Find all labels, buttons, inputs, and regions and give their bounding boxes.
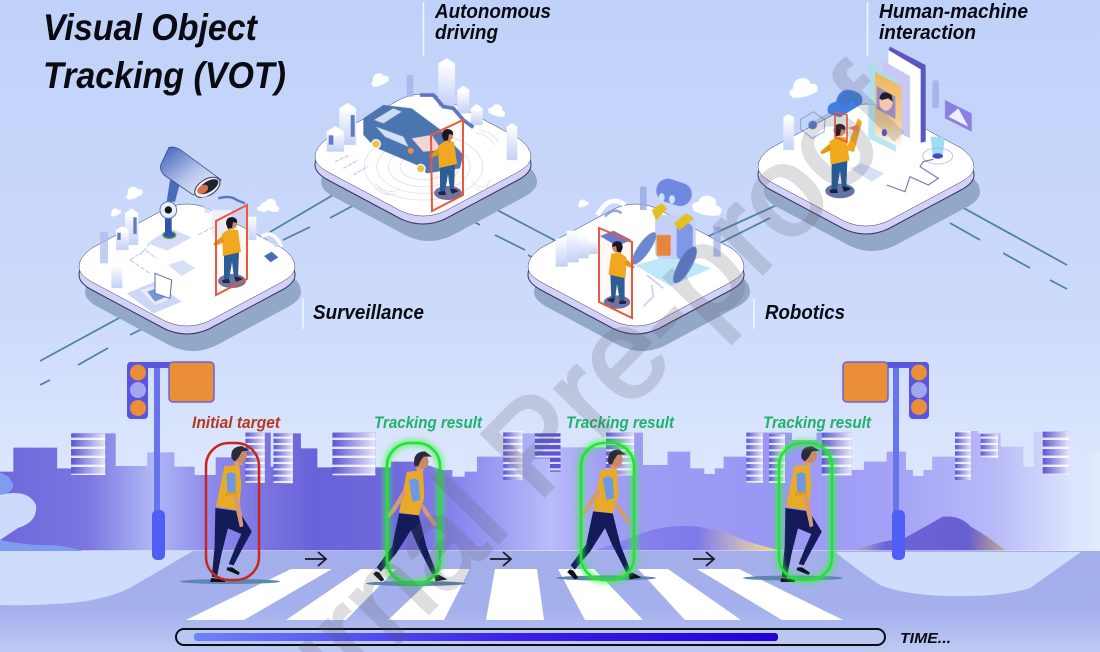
label: human-machine interaction: interaction xyxy=(879,22,976,44)
surveillance illustration xyxy=(100,147,282,313)
street scene: left skyline xyxy=(0,431,550,550)
label: autonomous driving: driving xyxy=(435,22,498,44)
icon: wifi node xyxy=(262,234,282,262)
icon: circuit line xyxy=(887,159,938,192)
crosswalk stripes xyxy=(186,569,843,620)
label: human-machine interaction xyxy=(868,1,1028,56)
person in red box: surveillance xyxy=(213,205,247,295)
label: robotics: Robotics xyxy=(765,302,845,324)
label: surveillance: Surveillance xyxy=(313,302,424,324)
right traffic light xyxy=(843,362,929,560)
person with red head box: interaction xyxy=(820,112,862,198)
icon: city blocks xyxy=(100,208,256,288)
right pavement xyxy=(835,552,1081,596)
icon: pillar and cube xyxy=(783,112,825,150)
label: surveillance xyxy=(303,298,424,329)
icon: control pad xyxy=(168,260,195,276)
icon: laptop xyxy=(127,273,182,313)
green box xyxy=(581,443,634,580)
label: tracking result 1: Tracking result xyxy=(374,414,483,432)
icon: robot xyxy=(628,176,701,286)
left bush xyxy=(0,493,36,540)
icon: surveillance camera xyxy=(160,147,223,213)
icon: wifi signal xyxy=(597,201,625,217)
icon: radar rings xyxy=(364,130,498,200)
label: human-machine interaction: Human-machine xyxy=(879,1,1028,23)
platform: robotics xyxy=(528,176,750,351)
platform: autonomous driving xyxy=(315,58,537,241)
label: time: TIME... xyxy=(900,630,951,647)
label: initial target: Initial target xyxy=(192,414,281,432)
person in red box: robotics xyxy=(599,228,635,318)
label: autonomous driving: Autonomous xyxy=(434,1,551,23)
red box xyxy=(206,443,259,580)
title: Tracking (VOT) xyxy=(43,55,286,96)
walker 1: initial target xyxy=(180,443,280,584)
road xyxy=(0,551,1100,652)
arrow 1 xyxy=(305,552,326,566)
label: tracking result 3: Tracking result xyxy=(763,414,872,432)
left lower bush xyxy=(0,540,82,551)
arrow 2 xyxy=(490,552,511,566)
title: Visual Object xyxy=(43,7,259,48)
icon: camera mount xyxy=(147,180,192,251)
icon: circuit xyxy=(643,275,663,306)
icon: control pad xyxy=(850,163,884,182)
green box xyxy=(779,443,832,580)
label: autonomous driving xyxy=(424,1,551,56)
label: robotics xyxy=(754,298,845,329)
icon: tablet xyxy=(600,231,632,246)
arrow 3 xyxy=(693,552,714,566)
left bushes xyxy=(0,473,13,495)
icon: clouds xyxy=(109,184,281,217)
interaction illustration xyxy=(783,47,972,192)
left traffic light xyxy=(127,362,214,560)
icon: road zigzag xyxy=(420,95,473,127)
timeline bar xyxy=(176,629,885,645)
walker 4: tracking result xyxy=(743,443,843,582)
icon: car xyxy=(363,105,463,173)
green box xyxy=(387,443,440,583)
platform: human-machine interaction xyxy=(758,47,980,251)
walker 3: tracking result xyxy=(556,443,656,580)
hill behind third figure xyxy=(596,526,780,550)
icon: clouds xyxy=(787,75,862,117)
icon: hologram xyxy=(923,137,953,164)
icon: clouds and buildings xyxy=(327,58,517,160)
street scene: right skyline xyxy=(550,431,1100,550)
title xyxy=(43,7,286,96)
hill behind right pole xyxy=(855,516,1005,550)
icon: phone panels xyxy=(868,47,926,152)
walker 2: tracking result xyxy=(366,443,466,586)
connecting lines between platforms xyxy=(40,188,1067,385)
driving illustration xyxy=(327,58,517,200)
person in red box: driving xyxy=(429,120,463,211)
label: tracking result 2: Tracking result xyxy=(566,414,675,432)
platform: surveillance xyxy=(79,147,301,351)
icon: picture frame xyxy=(932,80,972,132)
left pavement xyxy=(0,551,193,605)
icon: tower blocks xyxy=(556,231,598,267)
icon: robot base glow xyxy=(635,255,712,286)
icon: circuit lines xyxy=(130,225,217,273)
icon: clouds and bars xyxy=(576,187,724,257)
robotics illustration xyxy=(556,176,724,306)
